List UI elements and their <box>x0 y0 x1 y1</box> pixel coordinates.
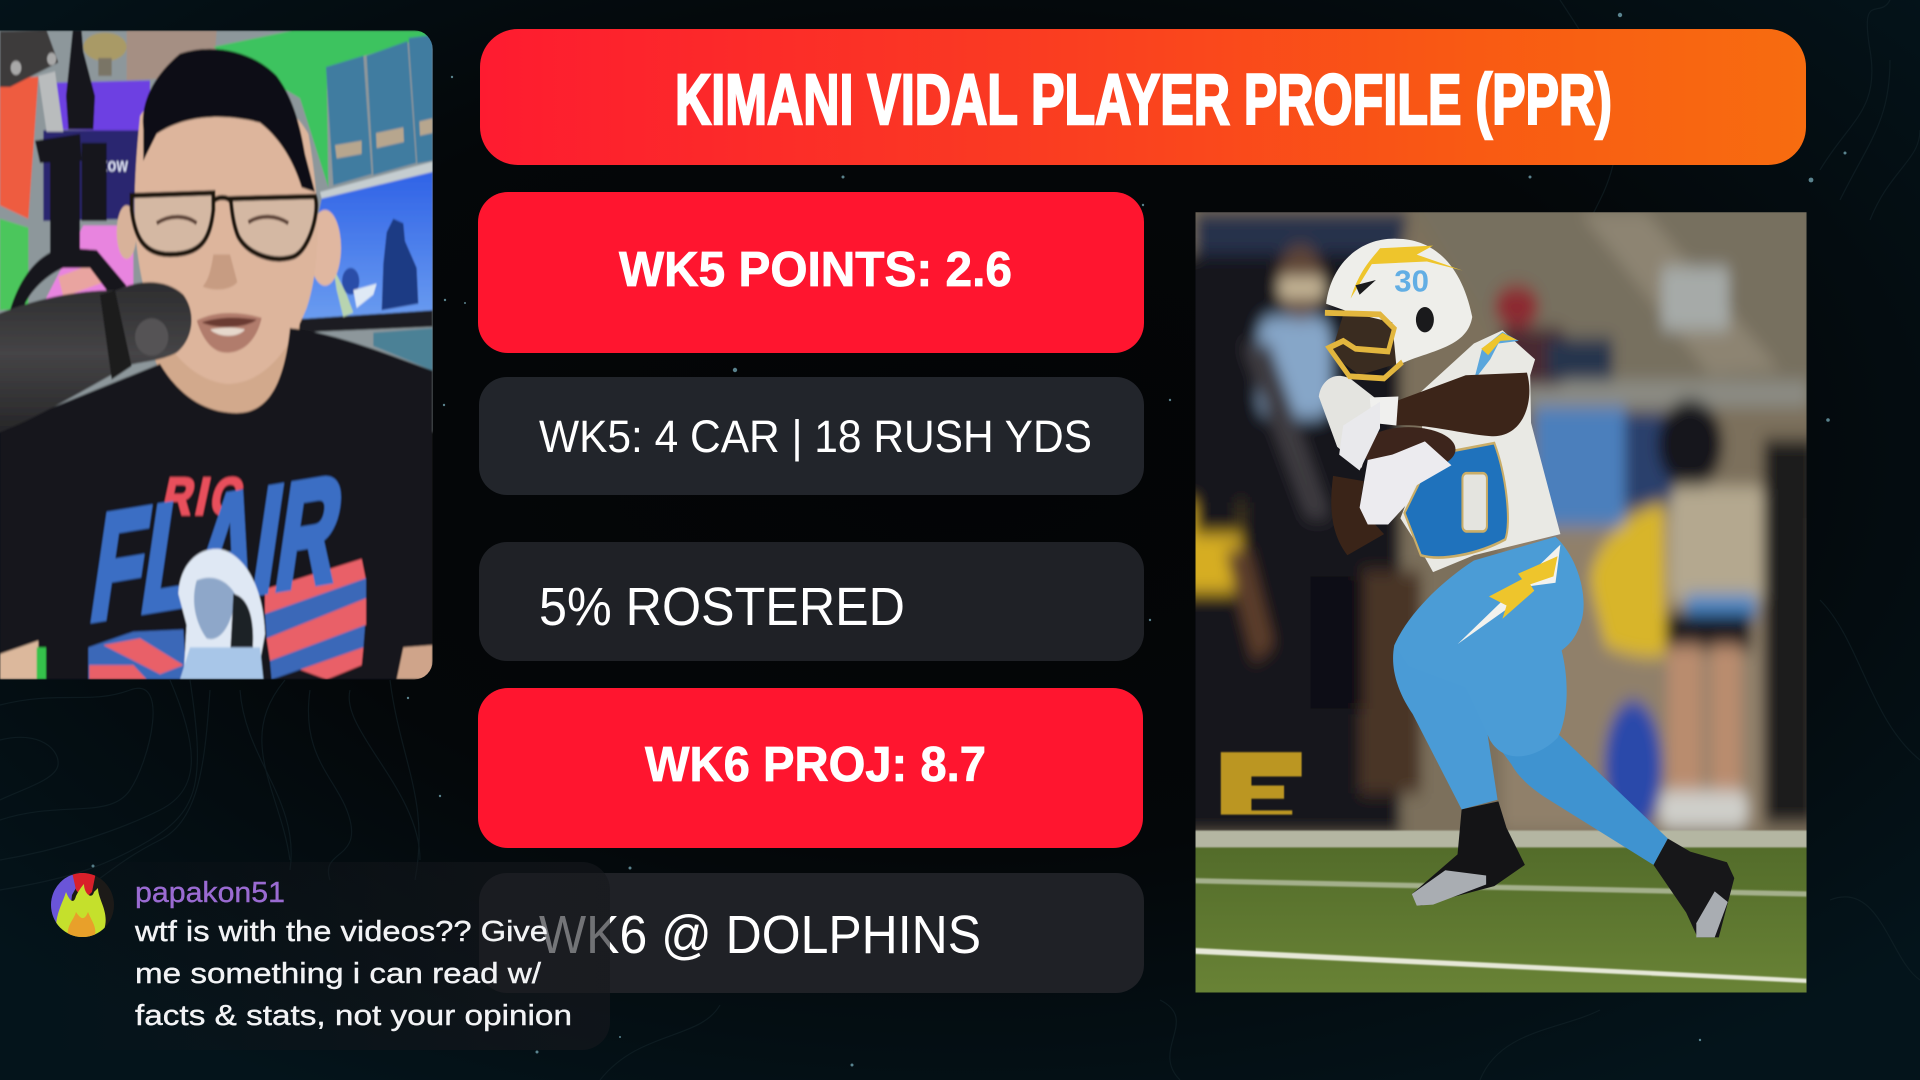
card: WK5 points <box>478 192 1144 353</box>
webcam room background: tow <box>103 153 128 176</box>
eyes <box>157 217 288 223</box>
card: rostered: 5% ROSTERED <box>539 577 905 637</box>
running back: 30 <box>1394 264 1429 298</box>
card: WK5 stats: WK5: 4 CAR | 18 RUSH YDS <box>539 411 1092 462</box>
face <box>135 85 318 384</box>
card: WK6 matchup <box>479 873 1144 993</box>
player photo <box>1196 212 1807 992</box>
blurred stadium background <box>1196 212 1806 832</box>
glasses <box>132 193 316 259</box>
presenter <box>0 49 433 679</box>
title banner <box>480 29 1806 165</box>
webcam panel <box>0 30 433 680</box>
chat comment overlay <box>38 862 610 1050</box>
comment bubble <box>38 862 610 1050</box>
microphone <box>0 282 192 440</box>
ears <box>309 210 341 286</box>
card: WK6 projection: WK6 PROJ: 8.7 <box>645 738 986 792</box>
comment text: me something i can read w/ <box>135 958 542 990</box>
running back <box>1319 239 1734 937</box>
icon: commenter avatar <box>50 872 116 938</box>
front leg and cleat <box>1412 801 1525 906</box>
jersey number <box>1404 443 1508 558</box>
card: WK5 points: WK5 POINTS: 2.6 <box>619 243 1012 297</box>
commenter name: papakon51 <box>135 877 285 909</box>
shirt graphic: Ric Flair logo: FLAIR <box>83 445 352 654</box>
neck <box>154 324 301 415</box>
football field <box>1196 830 1807 992</box>
card: rostered <box>479 542 1144 661</box>
hair <box>143 49 315 192</box>
helmet <box>1333 316 1396 374</box>
shoulder bolt <box>1475 332 1519 375</box>
microphone stand <box>10 30 127 312</box>
jersey <box>1400 330 1560 572</box>
webcam room background <box>0 30 447 432</box>
comment text: wtf is with the videos?? Give <box>134 916 548 948</box>
card: WK5 stats <box>479 377 1144 495</box>
shirt graphic: Ric Flair logo: RIC <box>157 468 251 526</box>
comment text <box>134 916 572 1032</box>
comment text: facts & stats, not your opinion <box>135 1000 572 1032</box>
arms and ball <box>1331 476 1384 555</box>
yellow stadium logo <box>1221 752 1302 815</box>
t-shirt <box>0 328 433 679</box>
card: WK6 matchup: WK6 @ DOLPHINS <box>539 905 981 965</box>
card: WK6 projection <box>478 688 1143 848</box>
shirt graphic: Ric Flair logo <box>83 445 366 679</box>
hips <box>1394 537 1584 756</box>
rear leg and cleat <box>1653 838 1734 937</box>
